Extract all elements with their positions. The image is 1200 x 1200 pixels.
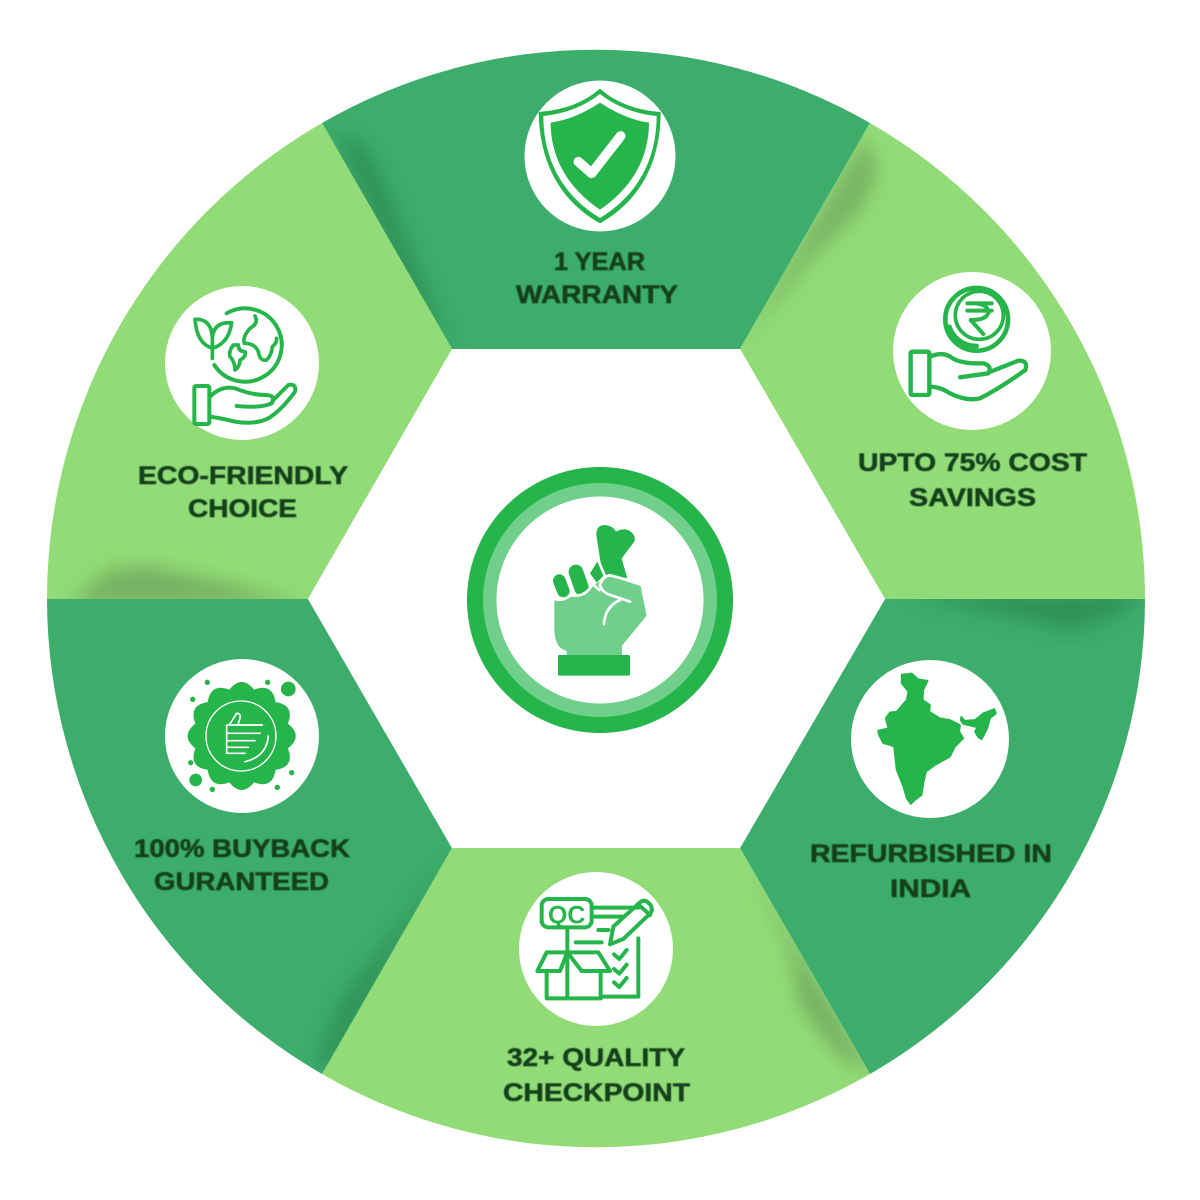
segment: lower left wedge — [47, 599, 452, 1074]
icon: shield with check — [524, 80, 676, 232]
label: refurbished in india: INDIA — [890, 875, 971, 903]
panel: buyback guaranteed — [47, 599, 452, 1074]
label: refurbished in india — [810, 840, 1052, 903]
fold shadow — [766, 900, 868, 1074]
center emblem: crossed fingers in rings — [467, 467, 733, 733]
icon: hand holding rupee coin — [893, 272, 1051, 430]
label: upto 75% cost savings: UPTO 75% COST — [858, 449, 1087, 477]
fold shadow — [934, 599, 1136, 634]
segment: top wedge — [322, 50, 870, 349]
fold shadow — [316, 895, 425, 1071]
label: upto 75% cost savings — [858, 449, 1087, 512]
panel: 1 year warranty — [322, 50, 870, 349]
fold shadow — [70, 566, 305, 604]
label: eco-friendly choice — [138, 462, 348, 523]
segment: upper right wedge — [740, 123, 1145, 599]
panel: eco-friendly choice — [47, 123, 452, 604]
label: 32+ quality checkpoint: 32+ QUALITY — [507, 1044, 685, 1072]
fold shadow — [757, 138, 884, 322]
segment: bottom wedge — [322, 848, 870, 1147]
label: 100% buyback guranteed: 100% BUYBACK — [134, 835, 350, 863]
label: refurbished in india: REFURBISHED IN — [810, 840, 1052, 868]
icon: globe, leaf and hand — [165, 286, 319, 440]
segment: lower right wedge — [740, 599, 1145, 1074]
fold shadow — [338, 134, 442, 326]
label: 100% buyback guranteed: GURANTEED — [154, 868, 329, 896]
label: 100% buyback guranteed — [134, 835, 350, 896]
segment: upper left wedge — [47, 123, 452, 599]
icon: thumbs up badge — [165, 659, 319, 813]
label: eco-friendly choice: CHOICE — [188, 495, 297, 523]
icon: qc box and checklist: QC — [548, 903, 586, 930]
rings — [467, 467, 733, 733]
icon: qc box and checklist — [519, 872, 673, 1026]
label: upto 75% cost savings: SAVINGS — [909, 484, 1036, 512]
label: 32+ quality checkpoint — [503, 1044, 690, 1107]
icon: map of india — [851, 660, 1009, 818]
label: 1 year warranty: 1 YEAR — [554, 248, 645, 276]
icon: crossed fingers hand — [554, 525, 647, 676]
label: 1 year warranty: WARRANTY — [516, 281, 678, 309]
center hexagon — [308, 349, 885, 848]
panel: quality checkpoint — [322, 848, 872, 1147]
label: eco-friendly choice: ECO-FRIENDLY — [138, 462, 348, 490]
label: 32+ quality checkpoint: CHECKPOINT — [503, 1079, 690, 1107]
panel: cost savings — [740, 123, 1145, 599]
panel: refurbished in india — [740, 594, 1145, 1074]
label: 1 year warranty — [516, 248, 678, 309]
